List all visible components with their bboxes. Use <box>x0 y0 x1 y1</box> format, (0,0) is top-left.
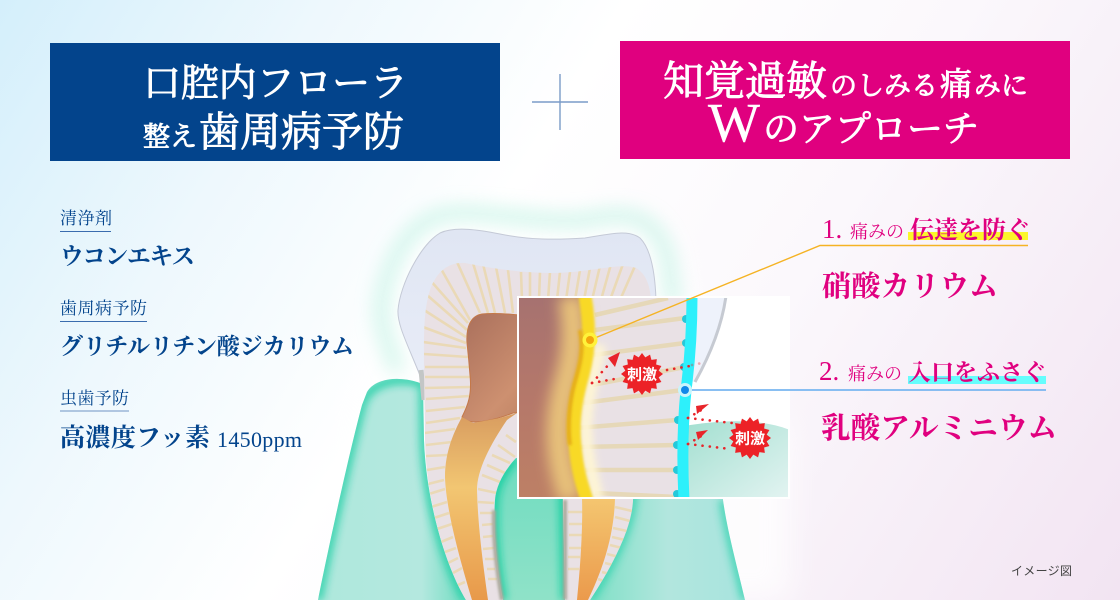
highlight: cyan <box>908 376 1046 384</box>
stimulus burst: upper: 刺激 <box>627 366 657 384</box>
stimulus burst: lower <box>729 417 771 459</box>
highlight: yellow <box>908 232 1028 240</box>
label: cavity prevention: 虫歯予防 <box>60 389 129 408</box>
ingredient: high concentration fluoride: 高濃度フッ素 <box>60 424 211 452</box>
enamel neck shadow <box>421 370 424 400</box>
panel: heading right <box>620 41 1070 159</box>
callout line: entrance <box>685 389 1046 391</box>
callout heading 2: 2. <box>819 356 839 386</box>
panel: heading left <box>50 43 500 161</box>
gum: between roots <box>494 458 565 600</box>
callout heading 1: 伝達を防ぐ <box>910 217 1030 244</box>
root shadows <box>494 500 565 600</box>
callout heading 2: 痛みの <box>848 364 902 384</box>
label: cleanser: 清浄剤 <box>60 209 112 228</box>
inset: magnified tooth detail <box>517 296 790 500</box>
inset cyan barrier <box>683 296 692 500</box>
inset dentin <box>579 298 686 497</box>
gum: left <box>318 379 466 600</box>
callout heading 2: 入口をふさぐ <box>908 360 1046 385</box>
label: periodontal prevention: 歯周病予防 <box>60 299 147 318</box>
inset secondary dentin glow <box>559 296 574 500</box>
heading: oral flora: 口腔内フローラ <box>143 63 408 105</box>
inset yellow band <box>574 296 588 500</box>
ingredient: potassium nitrate: 硝酸カリウム <box>822 270 998 303</box>
illustration: tooth and gums <box>318 208 790 600</box>
enamel crown <box>398 229 656 400</box>
heading: periodontal prevention: 歯周病予防 <box>199 109 404 155</box>
arrowheads <box>608 352 709 440</box>
root canal: left <box>445 413 517 600</box>
heading: W approach: のアプローチ <box>763 109 979 149</box>
inset tubule plugs <box>673 315 686 497</box>
ingredient: aluminum lactate: 乳酸アルミニウム <box>821 412 1057 445</box>
marker: blue point <box>678 383 692 397</box>
tooth glow <box>340 208 790 600</box>
stimulus arrows: dentin <box>592 362 732 449</box>
heading: sensitivity pain: 痛 <box>940 66 972 102</box>
inset pale glow <box>586 345 600 500</box>
caption: image note: イメージ図 <box>1011 564 1072 578</box>
inset enamel <box>692 298 724 382</box>
marker: yellow point <box>582 332 598 348</box>
icon: plus sign <box>532 74 588 130</box>
heading: sensitivity pain: みに <box>974 71 1028 101</box>
pulp chamber <box>462 313 560 422</box>
root canal: right <box>577 498 615 600</box>
dentin with tubules <box>423 262 651 600</box>
ingredient amount: 1450ppm <box>217 427 302 452</box>
heading: W approach: W <box>708 92 760 153</box>
gum: right <box>590 499 745 600</box>
panel: left ingredient list <box>60 209 354 452</box>
callout heading 1: 1. <box>822 214 842 244</box>
panel: right callouts <box>819 214 1057 445</box>
inset dentin tubules <box>577 298 685 497</box>
ingredient: dipotassium glycyrrhizinate: グリチルリチン酸ジカリウム <box>60 334 354 359</box>
callout heading 1: 痛みの <box>850 222 904 242</box>
heading: periodontal prevention: 整え <box>143 122 197 152</box>
inset pulp <box>519 298 583 497</box>
heading: sensitivity pain: のしみる <box>830 71 938 101</box>
heading: sensitivity pain: 知覚過敏 <box>663 58 827 104</box>
ingredient: turmeric extract: ウコンエキス <box>60 244 195 270</box>
inset gum <box>684 421 790 500</box>
callout line: transmission <box>590 246 1028 340</box>
stimulus burst: lower: 刺激 <box>735 430 765 448</box>
stimulus burst: upper <box>621 353 663 395</box>
